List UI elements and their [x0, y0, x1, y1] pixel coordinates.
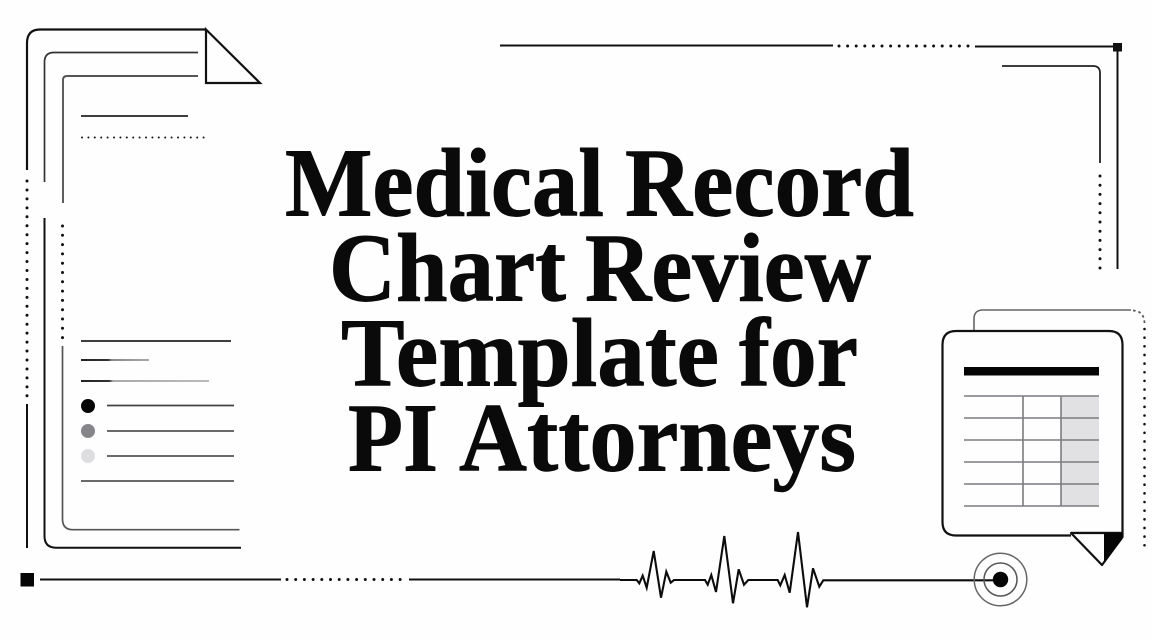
icon: document outline with folded corner — [27, 30, 260, 548]
card folded corner — [1071, 533, 1122, 565]
title: Record — [625, 130, 914, 236]
icon: back sheet of chart — [974, 310, 1144, 547]
document text lines: bottom — [81, 341, 234, 481]
target marker — [974, 553, 1027, 606]
title: Template — [341, 300, 719, 406]
folded corner — [206, 30, 260, 83]
title: for — [739, 300, 858, 406]
heartbeat line — [620, 532, 1000, 607]
title: Medical — [285, 130, 604, 236]
title: Attorneys — [459, 384, 856, 492]
title — [285, 130, 914, 492]
legend dots — [81, 399, 95, 463]
title: Review — [585, 214, 871, 322]
table — [964, 396, 1099, 506]
icon: chart card with table — [942, 331, 1122, 565]
title: PI — [348, 384, 438, 492]
top right corner frame — [500, 43, 1122, 270]
header bar — [964, 367, 1099, 376]
title: Chart — [329, 214, 566, 322]
document text lines: top — [81, 116, 205, 138]
bottom timeline with square marker — [20, 573, 620, 586]
